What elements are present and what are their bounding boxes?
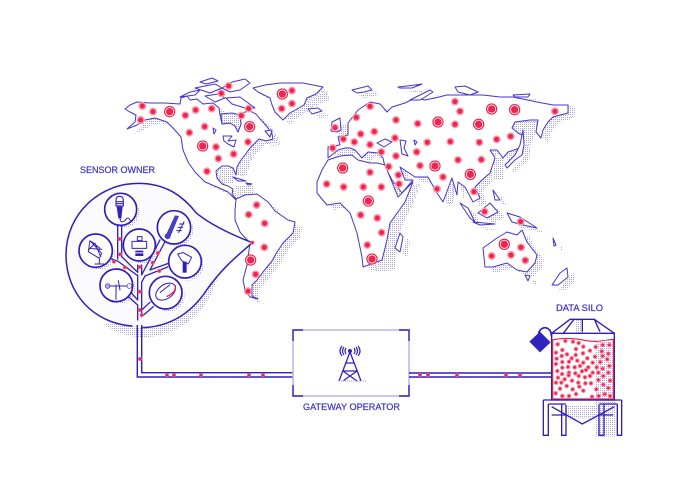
silo interior stipple (595, 340, 613, 398)
panel: sensor owner teardrop (66, 183, 254, 337)
sensor circle: station box (123, 229, 155, 261)
sensor tree branches (112, 225, 168, 320)
heading: sensor owner: SENSOR OWNER (80, 165, 155, 176)
sensor circle: anemometer (100, 269, 133, 302)
world map (125, 78, 576, 304)
stored data dots (553, 339, 612, 399)
connection line: gateway to silo (409, 373, 552, 377)
sensor circle: rain gauge (149, 276, 182, 309)
connection line: sensor owner to gateway (137, 325, 293, 377)
sensor circle: satellite dish (79, 234, 112, 267)
silo body (552, 333, 614, 400)
circle shadows (82, 196, 204, 312)
arctic islands (180, 78, 272, 137)
great lakes (213, 128, 236, 147)
sensor density dots: Americas (137, 82, 296, 295)
sensor circle: thermometer (157, 211, 191, 244)
icon: radio tower (339, 346, 366, 381)
sensor density dots: Eurasia, Africa, Oceania (323, 98, 559, 265)
data nodes on branches (112, 237, 254, 317)
data silo (529, 319, 622, 437)
label: data silo: DATA SILO (556, 303, 603, 314)
sensor circle: microphone (105, 193, 137, 225)
continent outlines (125, 78, 568, 299)
silo data fill (553, 338, 613, 399)
label: gateway operator: GATEWAY OPERATOR (303, 402, 400, 413)
hudson bay (221, 113, 241, 132)
sensor circle: soil probe (169, 245, 201, 278)
teardrop outline (66, 183, 252, 328)
caribbean (233, 177, 252, 185)
icon: padlock (529, 328, 552, 352)
silo legs and hopper (543, 400, 622, 435)
panel: gateway operator (293, 330, 409, 396)
teardrop shadow (103, 275, 218, 337)
silo shadow (567, 320, 615, 437)
silo roof (552, 319, 614, 333)
map shadows (132, 88, 576, 304)
inland seas (377, 139, 417, 156)
